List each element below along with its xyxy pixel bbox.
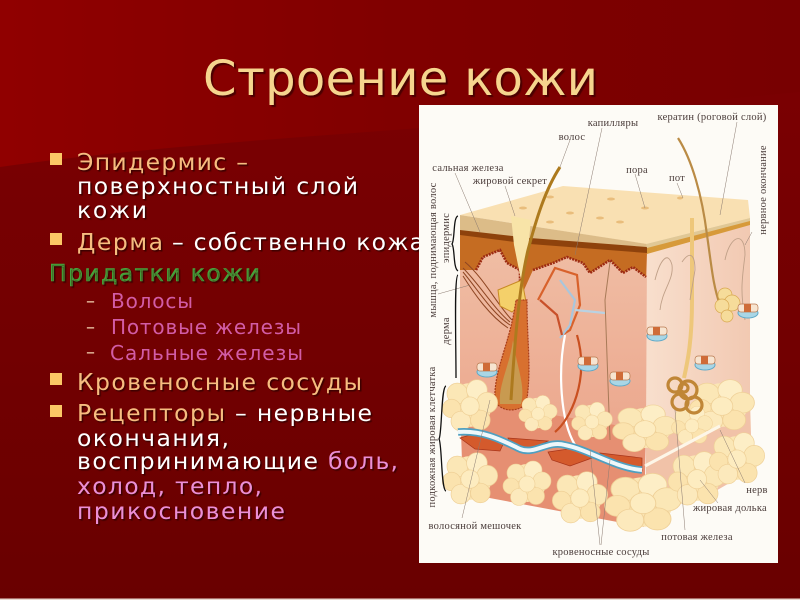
right papillae bbox=[655, 239, 745, 320]
right side lower layer bbox=[646, 400, 752, 510]
labels bbox=[427, 112, 769, 558]
panel: skin diagram bbox=[419, 105, 778, 563]
labels: потовая железа bbox=[661, 532, 733, 543]
right hair bbox=[678, 138, 720, 305]
labels: сальная железа bbox=[432, 163, 504, 174]
receptors paragraph: боль, bbox=[328, 447, 398, 475]
leader lines bbox=[438, 122, 752, 545]
diagram background bbox=[419, 105, 778, 563]
labels: капилляры bbox=[588, 118, 638, 129]
hair follicle bbox=[495, 300, 529, 410]
dermis front bbox=[460, 231, 647, 430]
labels: волосяной мешочек bbox=[428, 521, 522, 532]
dermis line: – собственно кожа bbox=[172, 228, 424, 256]
title: Строение кожи bbox=[203, 51, 598, 107]
capillaries bbox=[538, 262, 610, 445]
blood vessel bbox=[458, 432, 642, 470]
bullet: epidermis bbox=[50, 153, 62, 165]
dermis line: Дерма bbox=[77, 228, 163, 256]
text block: skin structure list bbox=[49, 148, 424, 525]
labels: мышца, поднимающая волос bbox=[428, 182, 439, 318]
labels: нервное окончание bbox=[758, 145, 769, 235]
heading: skin appendages: Придатки кожи bbox=[49, 259, 260, 287]
fat lobules bbox=[442, 380, 765, 531]
receptors paragraph bbox=[77, 399, 398, 525]
hair bulb bbox=[500, 340, 522, 404]
nerve branch bbox=[645, 426, 720, 466]
papillary edge bbox=[476, 250, 646, 300]
receptors paragraph: воспринимающие bbox=[77, 447, 318, 475]
sweat duct bbox=[684, 218, 692, 378]
labels: нерв bbox=[746, 485, 768, 496]
term: epidermis: Эпидермис – bbox=[77, 148, 248, 176]
receptors paragraph: прикосновение bbox=[77, 497, 285, 525]
sub-list: appendages: Волосы bbox=[111, 289, 193, 313]
dark band bbox=[460, 230, 647, 253]
receptors paragraph: – нервные bbox=[235, 399, 372, 427]
sub-list: appendages: – bbox=[86, 342, 95, 363]
right sebaceous gland bbox=[715, 288, 740, 322]
epidermis description: кожи bbox=[77, 196, 147, 224]
papillary layer bbox=[460, 232, 647, 300]
right cut side of skin bbox=[646, 218, 750, 430]
labels: дерма bbox=[441, 317, 452, 345]
arteries bbox=[460, 432, 642, 471]
sub-list: appendages: Сальные железы bbox=[110, 341, 303, 365]
brackets bbox=[439, 216, 458, 491]
receptors bbox=[477, 304, 758, 386]
sub-list: appendages bbox=[86, 289, 303, 365]
bullet: dermis bbox=[50, 233, 62, 245]
right band bbox=[647, 220, 750, 254]
term: blood vessels: Кровеносные сосуды bbox=[77, 368, 362, 396]
sub-list: appendages: Потовые железы bbox=[111, 315, 301, 339]
labels: пора bbox=[626, 165, 648, 176]
labels: эпидермис bbox=[441, 213, 452, 263]
muscle bbox=[463, 262, 512, 328]
labels: жировая долька bbox=[692, 503, 767, 514]
epidermis front bbox=[460, 215, 647, 252]
receptors paragraph: Рецепторы bbox=[77, 399, 225, 427]
bullet: blood vessels bbox=[50, 373, 62, 385]
labels: кератин (роговой слой) bbox=[657, 112, 767, 123]
receptors paragraph: окончания, bbox=[77, 424, 229, 452]
right epidermis bbox=[646, 218, 750, 248]
labels: волос bbox=[559, 132, 585, 143]
epidermis description bbox=[77, 172, 358, 224]
sebaceous gland bbox=[498, 280, 526, 312]
sub-list: appendages: – bbox=[86, 317, 95, 338]
labels: кровеносные сосуды bbox=[552, 547, 650, 558]
epidermis description: поверхностный слой bbox=[77, 172, 358, 200]
pores bbox=[519, 196, 683, 224]
hair bbox=[511, 167, 560, 400]
sweat gland coil bbox=[668, 378, 702, 413]
pore secretion bbox=[511, 216, 531, 285]
subcutaneous fat layer front bbox=[460, 400, 646, 527]
sub-list: appendages: – bbox=[86, 291, 95, 312]
labels: пот bbox=[669, 173, 685, 184]
receptors paragraph: холод, тепло, bbox=[77, 472, 262, 500]
labels: жировой секрет bbox=[472, 176, 547, 187]
bullet: receptors bbox=[50, 405, 62, 417]
labels: подкожная жировая клетчатка bbox=[427, 366, 438, 507]
skin surface bbox=[460, 186, 750, 244]
